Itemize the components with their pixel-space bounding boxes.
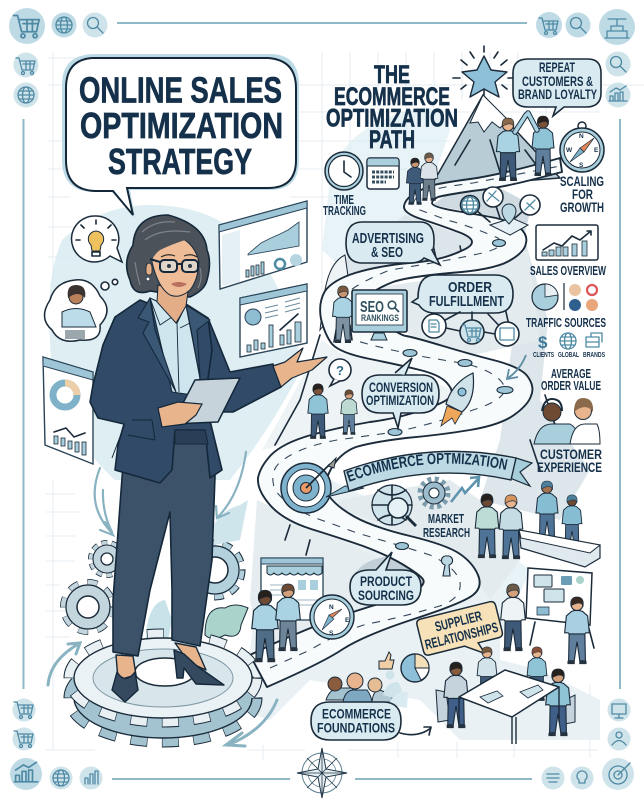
ecommerce foundations bubble: ECOMMERCE: [322, 706, 391, 722]
conversion bubble: OPTIMIZATION: [366, 393, 434, 408]
mountain peak: [430, 95, 560, 188]
conversion bubble: CONVERSION: [369, 380, 433, 395]
title speech bubble: OPTIMIZATION: [80, 105, 283, 146]
corner icons: top right: [536, 9, 635, 108]
product compass: [310, 595, 354, 639]
growth compass: S: [579, 162, 584, 169]
repeat customers bubble: CUSTOMERS &: [522, 73, 593, 89]
traffic sources: TRAFFIC SOURCES: [526, 316, 606, 330]
scaling for growth label: FOR: [572, 186, 593, 202]
winding road: [250, 158, 562, 687]
time tracking label: TRACKING: [323, 204, 366, 218]
market research: MARKET: [428, 511, 464, 526]
repeat customers bubble: [513, 59, 601, 116]
question bubble: ?: [336, 363, 344, 378]
presentation board: [526, 568, 594, 648]
watercolor wash: background: [49, 108, 600, 740]
seo analyst person: [333, 286, 353, 343]
conversion bubble: [362, 358, 439, 428]
presenters: [501, 584, 589, 664]
meeting pie and thumbs up: [379, 652, 429, 682]
clients global brands: GLOBAL: [558, 352, 580, 359]
average order value: AVERAGE: [551, 366, 591, 381]
average order value: [541, 366, 601, 393]
compass rose: [297, 748, 347, 798]
target icon: [281, 458, 336, 513]
hillside rock shading: [250, 188, 590, 655]
order process icons: [422, 312, 519, 346]
clients global brands: BRANDS: [583, 352, 605, 359]
woman right hand: [273, 348, 327, 387]
conversion team: [308, 384, 357, 439]
growth compass: E: [594, 147, 599, 154]
path heading: THE: [374, 61, 410, 89]
product sourcing bubble: PRODUCT: [360, 574, 413, 589]
advertising bubble: & SEO: [371, 244, 403, 261]
time tracking label: [323, 193, 366, 218]
title speech bubble: ONLINE SALES: [79, 70, 282, 110]
path heading: ECOMMERCE: [334, 83, 450, 111]
calendar icon: [367, 158, 399, 189]
road markers: [388, 240, 513, 576]
gear platform: [71, 636, 255, 740]
title speech bubble: STRATEGY: [108, 141, 252, 182]
product compass: N: [329, 604, 334, 611]
meeting table scene: [436, 647, 575, 744]
scaling for growth label: GROWTH: [560, 199, 604, 215]
traffic sources: [526, 283, 606, 330]
bushes and clouds: [146, 500, 248, 640]
clock icon: [325, 152, 363, 190]
market research: [372, 477, 479, 540]
customer experience team: EXPERIENCE: [537, 460, 602, 475]
product compass: E: [345, 617, 350, 624]
thought bubble with colleague: [44, 279, 118, 341]
product sourcing bubble: [350, 552, 421, 605]
supplier relationships tag: SUPPLIER: [433, 607, 483, 635]
seo rankings monitor: SEO: [360, 299, 384, 316]
woman jacket: [90, 298, 281, 483]
product sourcing bubble: SOURCING: [358, 588, 414, 603]
foundation team: [326, 670, 408, 708]
high five pair: [496, 113, 554, 181]
motion arrows around woman: [48, 452, 277, 746]
woman tablet: [172, 378, 240, 424]
woman left hand: [158, 402, 202, 427]
growth compass: [560, 122, 604, 172]
time tracking label: TIME: [334, 193, 354, 207]
repeat customers bubble: BRAND LOYALTY: [518, 86, 597, 102]
clients global brands: CLIENTS: [533, 352, 554, 359]
path heading: [326, 61, 458, 154]
order fulfillment bubble: FULFILLMENT: [429, 293, 504, 310]
scaling for growth label: SCALING: [560, 173, 604, 189]
woman shoes: [112, 643, 224, 702]
sales overview chart: [530, 225, 606, 278]
pins and icons above road: [460, 187, 540, 235]
arrow from foundations: [400, 727, 431, 735]
growth compass: N: [579, 133, 584, 140]
pair on upper road: [406, 153, 438, 205]
woman trousers: [113, 430, 215, 656]
woman: strategist: [90, 215, 327, 702]
ecommerce foundations bubble: FOUNDATIONS: [317, 720, 395, 736]
order fulfillment bubble: ORDER: [448, 279, 492, 296]
star on peak: [453, 46, 515, 97]
advertising bubble: [346, 222, 440, 265]
woman neck and head: [127, 215, 210, 323]
order fulfillment bubble: [412, 275, 513, 313]
factory workers and conveyor: [475, 481, 600, 567]
dashboard panel left: [43, 357, 93, 464]
ecommerce optimization banner: ECOMMERCE OPTMIZATION: [346, 453, 508, 482]
repeat customers bubble: REPEAT: [539, 59, 575, 75]
arrow to average order value: [507, 355, 526, 379]
dashboard panel top: [219, 201, 307, 289]
corner icons: bottom right: [542, 698, 634, 790]
dashboard panel middle: [240, 284, 307, 357]
customer experience team: CUSTOMER: [540, 447, 602, 462]
title speech bubble: [62, 54, 299, 218]
supplier relationships tag: RELATIONSHIPS: [423, 619, 500, 652]
seo rankings monitor: RANKINGS: [361, 313, 399, 323]
path heading: PATH: [369, 126, 415, 154]
scaling for growth label: [560, 173, 604, 215]
store team: [252, 584, 300, 662]
clients global brands: [533, 333, 605, 359]
corner icons: top left: [9, 8, 108, 108]
customer experience team: [534, 398, 602, 475]
path heading: OPTIMIZATION: [326, 104, 458, 132]
rocket: [441, 373, 474, 426]
question bubble: [329, 359, 351, 386]
gears beside woman: [65, 544, 240, 630]
sales overview chart: SALES OVERVIEW: [530, 264, 606, 278]
product compass: S: [329, 630, 334, 637]
clients global brands: $: [538, 333, 548, 352]
market research: RESEARCH: [423, 525, 470, 540]
ecommerce foundations bubble: [311, 702, 401, 740]
storefront panel: [261, 558, 323, 620]
growth compass: W: [566, 147, 573, 154]
supplier relationships tag: [416, 601, 506, 668]
corner icons: bottom left: [10, 698, 102, 790]
ecommerce optimization banner: [326, 450, 534, 498]
seo rankings monitor: [352, 290, 407, 340]
lightbulb bubble: [72, 216, 122, 262]
average order value: ORDER VALUE: [541, 378, 601, 393]
advertising bubble: ADVERTISING: [352, 230, 424, 247]
